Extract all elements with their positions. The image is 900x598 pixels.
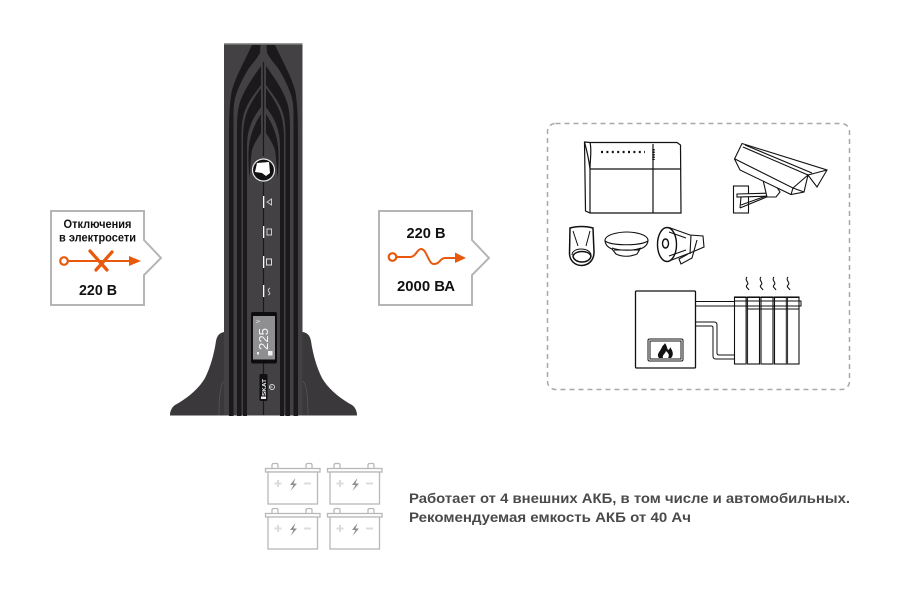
tower body bbox=[224, 43, 302, 416]
UPS tower bbox=[170, 43, 357, 416]
logo bbox=[252, 159, 274, 181]
power button bbox=[260, 374, 274, 401]
battery note: Рекомендуемая емкость АКБ от 40 Ач bbox=[409, 510, 691, 525]
LCD display bbox=[251, 312, 277, 364]
icon: CCTV camera bbox=[734, 144, 827, 213]
battery note: Работает от 4 внешних АКБ, в том числе и автомобильных. bbox=[409, 491, 850, 506]
stand base bbox=[170, 332, 357, 416]
front stripes bbox=[229, 45, 298, 416]
batteries bbox=[266, 464, 382, 549]
icon: motion sensor bbox=[570, 226, 594, 266]
icon: siren bbox=[658, 228, 704, 264]
battery 1 bbox=[266, 464, 320, 504]
callout: mains outage bbox=[51, 211, 161, 305]
power button: SKAT bbox=[262, 378, 268, 396]
outage text: Отключения bbox=[64, 219, 132, 231]
icon: smoke detector bbox=[605, 232, 648, 256]
battery 4 bbox=[328, 508, 382, 549]
base contour bbox=[219, 381, 308, 415]
callout: output bbox=[379, 211, 489, 305]
output voltage: 220 В bbox=[406, 225, 446, 242]
callout: mains outage: в электросети bbox=[59, 232, 136, 244]
broken line icon bbox=[60, 251, 141, 270]
sine wave icon bbox=[389, 249, 466, 264]
LCD display: V bbox=[256, 319, 262, 323]
LCD display: 225 bbox=[257, 328, 271, 350]
panel: protected equipment bbox=[548, 124, 850, 390]
output power: 2000 ВА bbox=[397, 278, 455, 295]
indicator: sine bbox=[263, 285, 270, 297]
indicator: battery bbox=[263, 256, 272, 268]
indicator: alarm bbox=[263, 196, 272, 208]
icon: control panel bbox=[584, 142, 681, 213]
indicator: battery mode bbox=[263, 226, 272, 238]
icon: boiler and radiator bbox=[636, 277, 801, 368]
battery 2 bbox=[328, 464, 382, 504]
battery 3 bbox=[266, 508, 320, 549]
outage voltage: 220 В bbox=[79, 282, 117, 299]
battery note bbox=[409, 491, 850, 525]
